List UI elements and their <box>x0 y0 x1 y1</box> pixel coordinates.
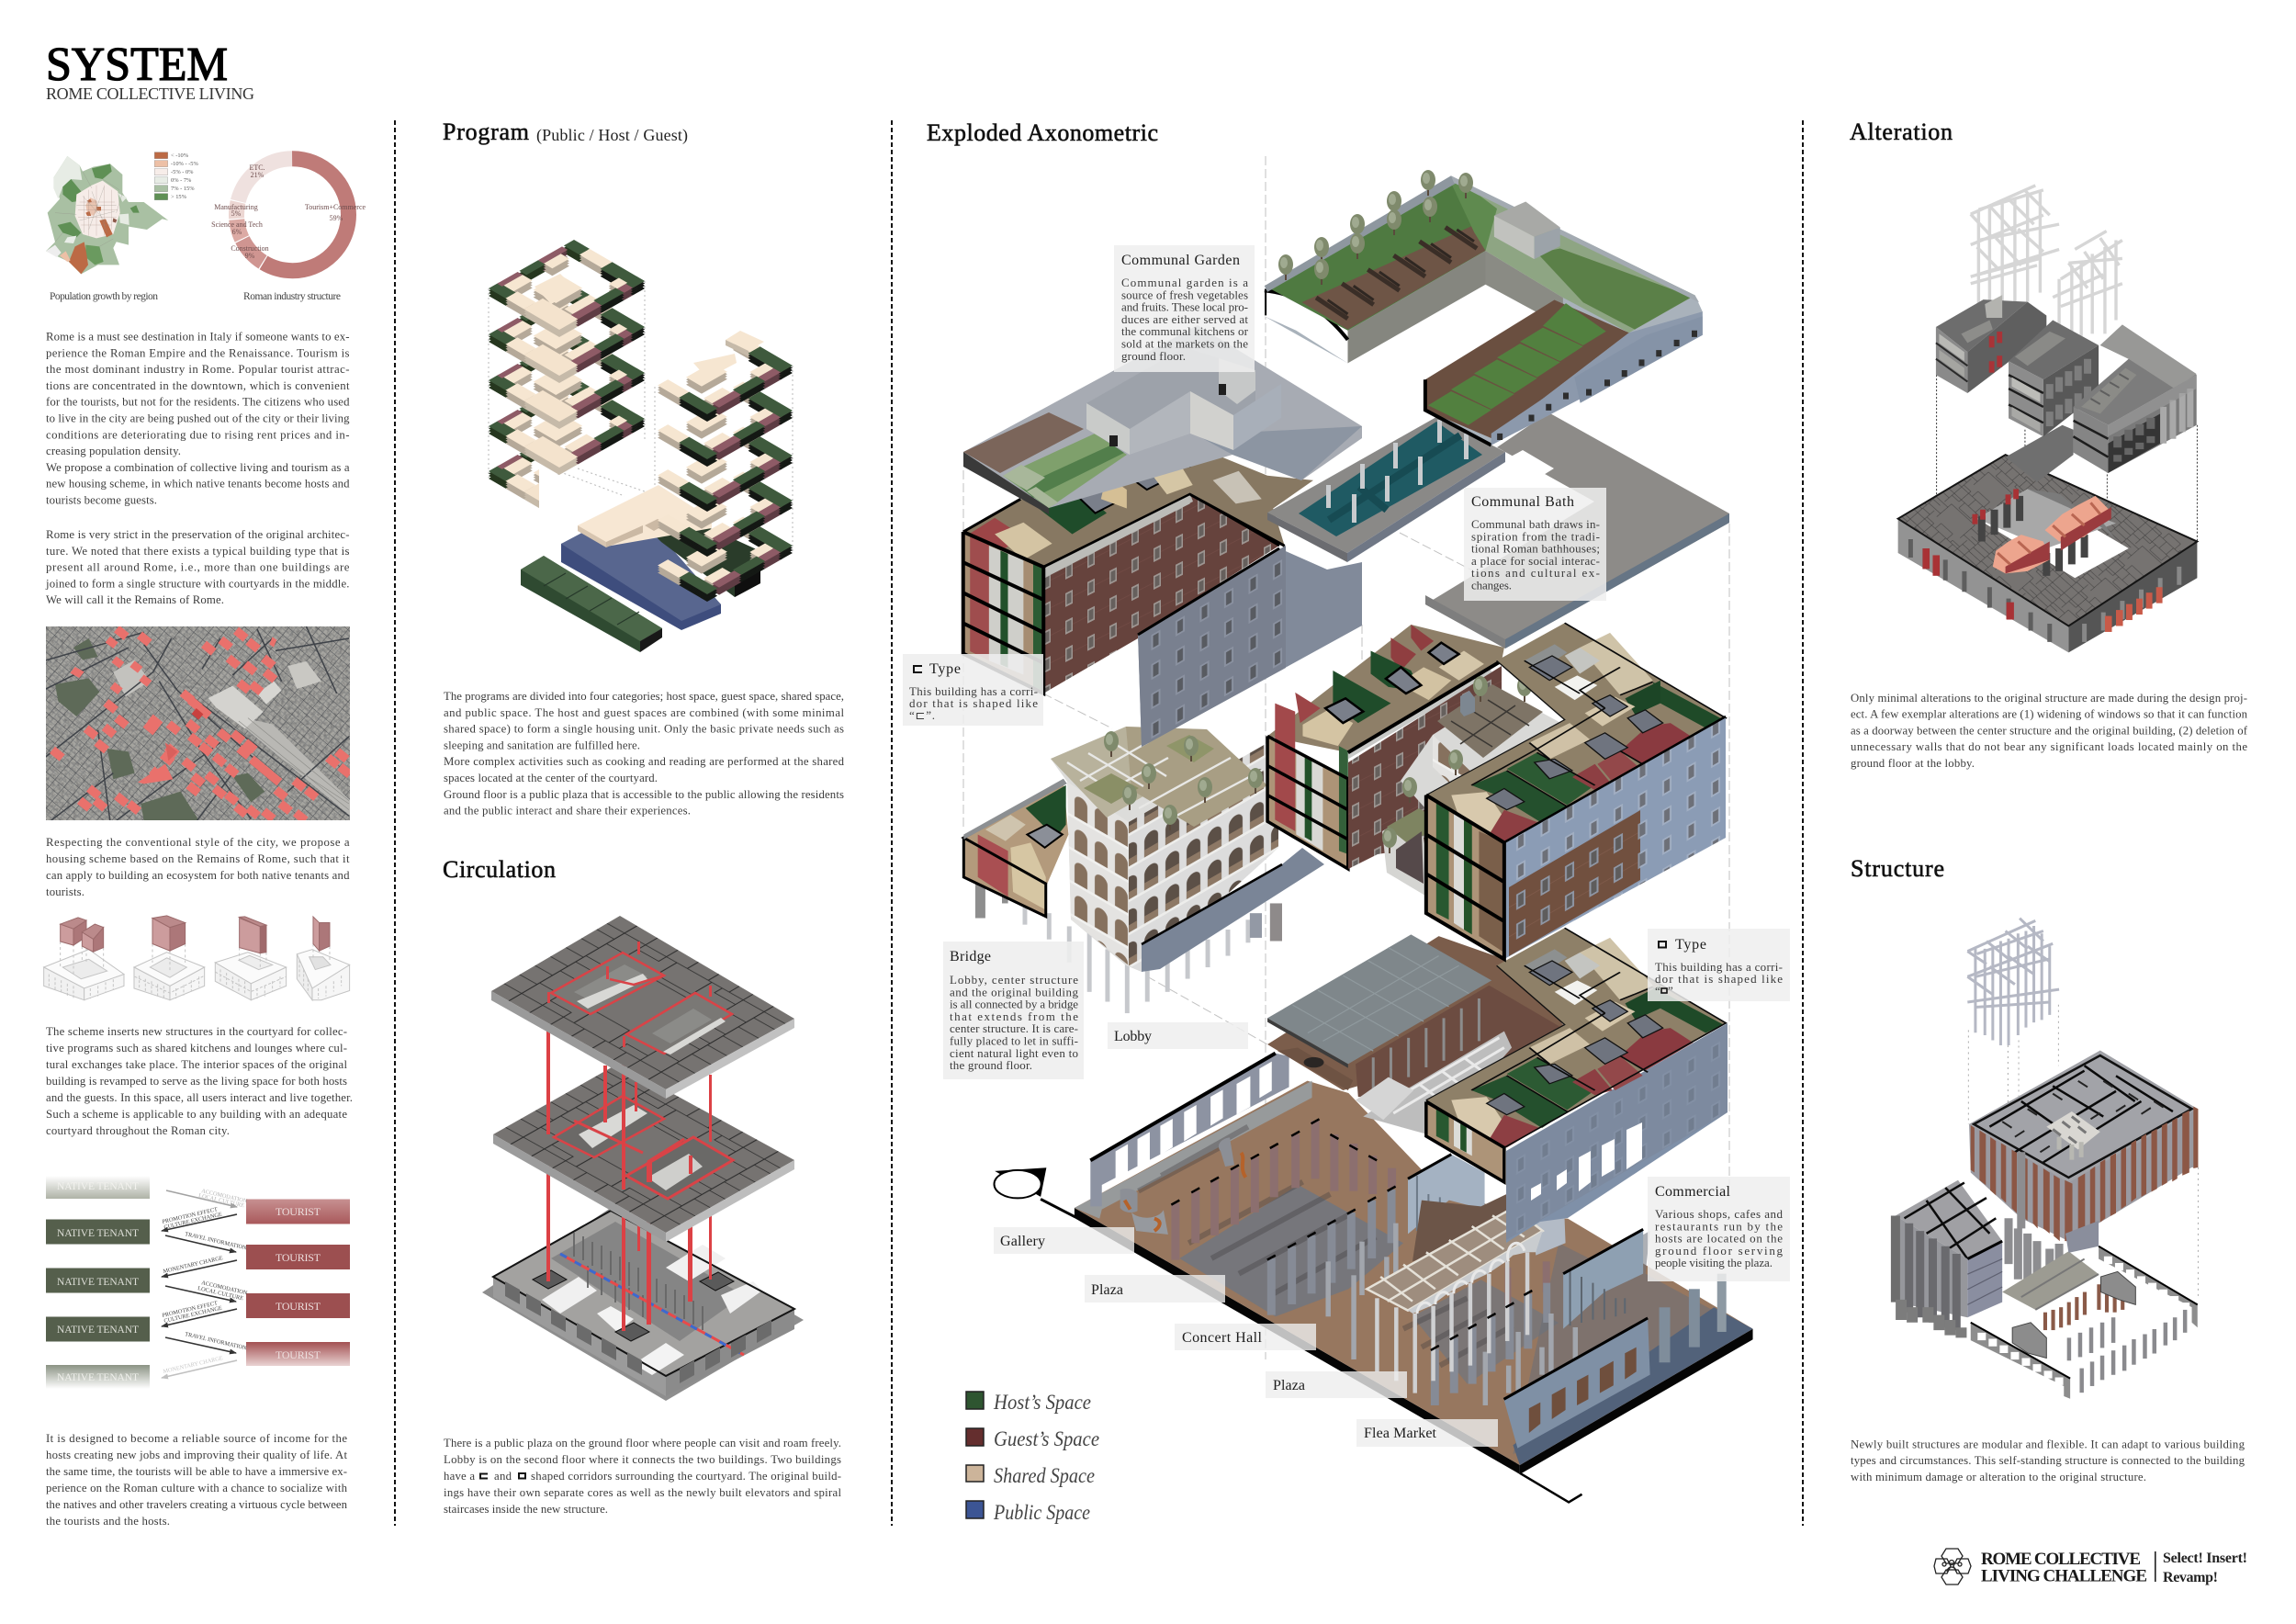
plaza columns <box>1171 1121 1550 1304</box>
dotted drop lines <box>1937 375 2197 553</box>
front block facade <box>1504 716 1726 959</box>
lobby roof <box>2002 1251 2099 1310</box>
arrow labels: ACCOMODATION <box>201 1280 248 1297</box>
map legend: > 15% <box>171 194 187 200</box>
callout: Lobby <box>1108 1022 1248 1049</box>
text: circulation description: ings have their own separate cores as well as the newly built elevators and spiral <box>444 1486 841 1499</box>
map legend: < -10% <box>171 152 189 159</box>
donut chart: Roman industry structure: 6% <box>232 228 242 236</box>
callout: Communal Bath: changes. <box>1471 579 1512 592</box>
map: population growth by region <box>46 152 168 274</box>
callout: Communal Garden: the communal kitchens or <box>1121 324 1249 338</box>
text: program description: The programs are divided into four categories; host space, guest space, shared space, <box>444 690 844 703</box>
donut chart: Roman industry structure <box>211 159 366 271</box>
lower block plan <box>1426 928 1726 1147</box>
text: courtyard paragraph: The scheme inserts new structures in the courtyard for collec- <box>46 1025 347 1038</box>
dotted guide lines <box>489 281 793 560</box>
brick inner wall <box>1348 666 1502 869</box>
text: scheme paragraph: can apply to building an ecosystem for both native tenants and <box>46 869 350 882</box>
callout: Commercial: people visiting the plaza. <box>1655 1256 1773 1269</box>
legend: Host’s Space <box>993 1391 1091 1414</box>
callout: left Type: “⊏”. <box>909 708 935 722</box>
lower facade with piers <box>1426 928 1728 1243</box>
arrow labels: TRAVEL INFORMATION <box>185 1231 248 1252</box>
native tenant boxes: NATIVE TENANT <box>57 1372 139 1383</box>
blue panel and rear wall <box>1563 1229 1727 1362</box>
lower block section <box>1426 1101 1504 1182</box>
roof slab <box>963 325 1362 514</box>
donut chart: Roman industry structure: 5% <box>231 209 242 218</box>
text: intro paragraph: tions are concentrated in the downtown, which is convenient <box>46 379 350 392</box>
callout: Communal Bath: Communal Bath <box>1471 494 1574 510</box>
callout: Bridge: cient natural light even to <box>950 1046 1078 1060</box>
arcade mass <box>1051 727 1278 972</box>
circulation diagram <box>482 916 804 1401</box>
footer title <box>1981 1550 2247 1585</box>
captions for map and donut: Population growth by region <box>50 291 158 302</box>
text: circulation description: There is a public plaza on the ground floor where people can visit and roam freely. <box>444 1437 841 1449</box>
lower right host blocks <box>643 514 760 597</box>
label: Plaza: Plaza <box>1273 1378 1305 1393</box>
scheme 4 <box>297 917 350 1000</box>
heading: Circulation: Circulation <box>443 856 556 883</box>
callout: right Type: This building has a corri- <box>1655 960 1783 974</box>
left block <box>1896 1180 2002 1337</box>
text: preservation paragraph: We will call it the Remains of Rome. <box>46 593 224 606</box>
callout: Commercial <box>1648 1177 1790 1281</box>
upper-left block <box>963 325 1362 747</box>
label: Plaza <box>1266 1371 1407 1398</box>
callout: Lobby: Lobby <box>1114 1029 1152 1044</box>
red vertical circulation upper <box>546 1031 712 1190</box>
blue glass partition <box>1408 1155 1485 1234</box>
callout: Commercial: Various shops, cafes and <box>1655 1207 1784 1221</box>
callout: Communal Bath: Communal bath draws in- <box>1471 517 1600 531</box>
arrow labels: PROMOTION EFFECT <box>162 1300 219 1319</box>
text: scheme paragraph: tourists. <box>46 885 84 898</box>
text: courtyard paragraph: Such a scheme is applicable to any building with an adequate <box>46 1108 347 1121</box>
text: alteration description <box>1851 692 2248 770</box>
native tenant boxes <box>46 1176 150 1389</box>
text: preservation paragraph <box>45 528 350 606</box>
callout: Bridge: Bridge <box>950 949 991 964</box>
text: structure description: types and circumstances. This self-standing structure is connected to the building <box>1851 1454 2245 1467</box>
upper plan rooms <box>963 429 1313 576</box>
hanging piers under upper block <box>2009 1152 2059 1287</box>
exchange arrows <box>162 1190 237 1378</box>
four building scheme diagrams <box>44 916 350 1000</box>
label: Gallery <box>994 1227 1134 1254</box>
upper section <box>963 532 1043 694</box>
text: circulation description: and <box>494 1470 512 1483</box>
text: intro paragraph: perience the Roman Empire and the Renaissance. Tourism is <box>46 346 350 359</box>
heading: Structure: Structure <box>1851 855 1944 882</box>
roof box <box>1494 201 1560 259</box>
label: Plaza <box>1085 1275 1225 1303</box>
brick piers right face <box>2078 1106 2198 1237</box>
tourist boxes: TOURIST <box>276 1300 321 1313</box>
arrow labels <box>162 1188 248 1375</box>
map legend: 0% - 7% <box>171 177 192 184</box>
roof volumes <box>1086 347 1281 455</box>
text: program description: spaces located at the center of the courtyard. <box>444 772 658 784</box>
text: program description: and the public interact and share their experiences. <box>444 805 691 818</box>
core boxes <box>2012 1271 2135 1359</box>
donut chart: Roman industry structure: Construction <box>231 244 269 253</box>
parapet facade <box>1491 311 1703 445</box>
upper block plan <box>1426 623 1726 842</box>
text: courtyard paragraph <box>46 1025 353 1137</box>
courtyard terrace arcs <box>1382 676 1566 896</box>
callout: Commercial: ground floor serving <box>1655 1244 1784 1257</box>
ground floor host blocks <box>521 556 662 652</box>
diagram: tenants and tourists exchange <box>46 1176 350 1389</box>
arrow labels: LOCAL CULTURE <box>197 1285 244 1302</box>
text: program description: shared space) to form a single housing unit. Only the basic private needs such as <box>444 723 844 736</box>
tourist boxes: TOURIST <box>276 1205 321 1218</box>
text: scheme paragraph: housing scheme based on the Remains of Rome, such that it <box>46 852 350 865</box>
text: preservation paragraph: ture. We noted that there exists a typical building type that is <box>46 545 350 558</box>
left tower floors <box>489 240 645 520</box>
text: intro paragraph: We propose a combination of collective living and tourism as a <box>46 461 350 474</box>
back block section and rooms <box>1267 625 1504 869</box>
stepped terrace <box>1425 300 1629 445</box>
callout: Bridge: Lobby, center structure <box>950 973 1078 987</box>
center arcade structure <box>963 727 1324 1013</box>
callout: Commercial: hosts are located on the <box>1655 1232 1783 1246</box>
heading: Program: (Public / Host / Guest) <box>536 126 688 145</box>
scheme 2 <box>134 916 205 1000</box>
callout: Bridge: and the original building <box>950 985 1078 998</box>
label: Gallery: Gallery <box>1000 1234 1045 1249</box>
upper wall mass <box>1969 1051 2198 1241</box>
text: circulation description: Lobby is on the second floor where it connects the two buildings. Two buildings <box>444 1453 841 1466</box>
captions for map and donut: Roman industry structure <box>243 291 341 302</box>
text: circulation description: have a <box>444 1470 475 1483</box>
red vertical circulation lower <box>546 1167 712 1331</box>
bridge roof grid <box>1367 1208 1543 1314</box>
text: intro paragraph: Rome is a must see destination in Italy if someone wants to ex- <box>46 331 349 344</box>
footer title: ROME COLLECTIVE <box>1981 1550 2141 1569</box>
native tenant boxes: NATIVE TENANT <box>57 1181 139 1192</box>
lower perimeter walls <box>1971 1246 2198 1399</box>
upper block 2 <box>2009 320 2099 436</box>
map legend: 7% - 15% <box>171 186 195 192</box>
callout: Communal Garden: source of fresh vegetables <box>1121 288 1248 301</box>
courtyard piers <box>2067 1310 2187 1393</box>
tourist boxes: TOURIST <box>276 1251 321 1264</box>
alteration highlights <box>1922 489 2163 632</box>
text: structure description <box>1851 1438 2245 1483</box>
legend: Public Space <box>993 1501 1090 1524</box>
callout: Bridge: is all connected by a bridge <box>950 998 1078 1011</box>
back wall with windows <box>1090 1054 1300 1206</box>
column dividers <box>395 120 1803 1526</box>
text: program description: and public space. The host and guest spaces are combined (with some minimal <box>444 706 844 719</box>
text: intro paragraph: new housing scheme, in which native tenants become hosts and <box>46 478 350 491</box>
heading: Program: Program <box>443 118 529 145</box>
text: income paragraph: the natives and other travelers creating a virtuous cycle between <box>46 1498 348 1511</box>
arrow labels: PROMOTION EFFECT <box>162 1206 219 1225</box>
callout: right Type: ” <box>1668 984 1673 998</box>
program diagram <box>489 240 793 652</box>
donut chart: Roman industry structure: 21% <box>251 171 264 179</box>
legend: Shared Space <box>994 1464 1095 1487</box>
footer title: LIVING CHALLENGE <box>1981 1567 2147 1585</box>
exploded axonometric drawing <box>963 156 1753 1502</box>
bridge slab <box>2006 425 2074 482</box>
structure diagram <box>1896 919 2198 1399</box>
scheme 1 <box>44 918 124 1000</box>
text: alteration description: unnecessary walls that do not bear any significant loads located mainly on the <box>1851 740 2247 753</box>
arrow labels: TRAVEL INFORMATION <box>185 1331 248 1352</box>
text: circulation description <box>444 1437 841 1516</box>
callout: Communal Bath: tional Roman bathhouses; <box>1471 542 1600 556</box>
text: alteration description: as a doorway between the center structure and the original building, (2) deletion of <box>1851 724 2248 737</box>
arcade blue wall <box>1142 848 1324 972</box>
heading: Exploded Axonometric: Exploded Axonometric <box>927 119 1158 146</box>
ground ring <box>1898 455 2197 652</box>
callout: Communal Garden: duces are either served at <box>1121 312 1248 326</box>
dashed guide lines <box>963 156 1729 1359</box>
arrow labels: LOCAL CULTURE <box>198 1192 245 1209</box>
callout: left Type: dor that is shaped like <box>909 696 1038 710</box>
callout: Communal Bath: tions and cultural ex- <box>1471 566 1600 580</box>
donut chart: Roman industry structure: Science and Tech <box>211 220 263 229</box>
arrow labels: MONENTARY CHARGE <box>163 1355 223 1375</box>
grey blue wall <box>1138 548 1362 747</box>
callout: Communal Garden: Communal Garden <box>1121 253 1240 268</box>
label: Flea Market: Flea Market <box>1364 1426 1437 1441</box>
donut chart: Roman industry structure: Tourism+Commerce <box>305 203 366 211</box>
callout: Communal Bath: a place for social interac- <box>1471 554 1600 568</box>
text: program description: More complex activities such as cooking and reading are performed at the shared <box>444 755 845 768</box>
tourist boxes: TOURIST <box>276 1348 321 1361</box>
text: intro paragraph: tourists become guests. <box>46 494 157 507</box>
callout: left Type: This building has a corri- <box>909 684 1038 698</box>
brick wall <box>1043 494 1279 694</box>
text: alteration description: ect. A few exemplar alterations are (1) widening of windows so that it can function <box>1851 708 2248 721</box>
callout: right Type: “ <box>1655 984 1660 998</box>
map legend <box>171 152 198 200</box>
text: alteration description: Only minimal alterations to the original structure are made during the design proj- <box>1851 692 2247 705</box>
arrow labels: MONENTARY CHARGE <box>163 1255 223 1275</box>
upper block 1 <box>1936 295 2046 393</box>
text: intro paragraph: for the tourists, but not for the residents. The citizens who used <box>46 396 350 409</box>
label: Concert Hall <box>1175 1324 1316 1350</box>
text: intro paragraph: conditions are deteriorating due to rising rent prices and in- <box>46 428 349 441</box>
text: intro paragraph: the most dominant industry in Rome. Popular tourist attrac- <box>46 363 349 376</box>
arrow labels: CULTURE EXCHANGE <box>163 1305 223 1325</box>
callout: Bridge: the ground floor. <box>950 1058 1032 1072</box>
donut chart: Roman industry structure: 59% <box>330 214 343 222</box>
callout: right Type: dor that is shaped like <box>1655 972 1783 986</box>
upper block 3 <box>2074 324 2197 473</box>
footer logo icon <box>1934 1549 1971 1585</box>
plaza ground floor <box>1075 1054 1753 1474</box>
callout: left Type: Type <box>929 661 961 677</box>
callout: Communal Garden: Communal garden is a <box>1121 276 1248 289</box>
text: circulation description: shaped corridors surrounding the courtyard. The original build- <box>531 1470 841 1483</box>
text: circulation description: staircases inside the new structure. <box>444 1503 608 1516</box>
text: courtyard paragraph: tural exchanges take place. The interior spaces of the original <box>46 1058 347 1071</box>
right tower floors <box>658 331 793 602</box>
garden trees <box>1278 170 1473 285</box>
callout: Bridge: center structure. It is care- <box>950 1021 1078 1035</box>
columns below arcade <box>975 877 1282 1013</box>
text: program description: sleeping and sanitation are fulfilled here. <box>444 739 640 751</box>
captions for map and donut <box>50 291 341 302</box>
label: Concert Hall: Concert Hall <box>1182 1330 1263 1346</box>
arrow labels: ACCOMODATION <box>201 1188 248 1205</box>
callout: Communal Bath: spiration from the tradi- <box>1471 529 1600 543</box>
map legend: -5% - 0% <box>171 169 194 175</box>
communal garden roof <box>1265 175 1703 445</box>
front block section <box>1426 795 1504 959</box>
map legend: -10% - -5% <box>171 161 198 167</box>
text: preservation paragraph: present all around Rome, i.e., more than one buildings are <box>46 561 350 574</box>
text: structure description: with minimum damage or alteration to the original structure. <box>1851 1471 2146 1483</box>
donut chart: Roman industry structure: ETC. <box>249 164 265 172</box>
gallery sculptures <box>1120 1137 1245 1235</box>
aerial photo of Rome <box>46 626 350 820</box>
ground floor <box>482 1208 804 1401</box>
pool <box>1267 417 1505 562</box>
public space block <box>561 505 721 630</box>
new white structure <box>2046 1111 2100 1160</box>
callout: Bridge: that extends from the <box>950 1009 1078 1023</box>
text: intro paragraph <box>46 331 350 507</box>
communal bath floor <box>1267 412 1729 648</box>
footer title: Select! Insert! <box>2163 1551 2247 1566</box>
text: courtyard paragraph: tive programs such as shared kitchens and lounges where cul- <box>46 1042 347 1054</box>
text: alteration description: ground floor at the lobby. <box>1851 757 1975 770</box>
steel frame <box>1967 919 2059 1045</box>
text: income paragraph: hosts creating new jobs and improving their quality of life. At <box>46 1449 347 1461</box>
title: ROME COLLECTIVE LIVING <box>46 85 254 103</box>
footer title: Revamp! <box>2163 1570 2218 1585</box>
arrow labels: CULTURE EXCHANGE <box>163 1212 223 1231</box>
text: courtyard paragraph: building is revamped to serve as the living space for both hosts <box>46 1075 347 1088</box>
text: program description: Ground floor is a public plaza that is accessible to the public allowing the residents <box>444 788 844 801</box>
native tenant boxes: NATIVE TENANT <box>57 1228 139 1239</box>
lobby pavilion <box>1267 934 1565 1136</box>
donut chart: Roman industry structure: 9% <box>245 252 255 260</box>
text: income paragraph: the same time, the tourists will be able to have a immersive ex- <box>46 1465 347 1478</box>
right block mid level <box>1267 623 1726 959</box>
text: income paragraph: the tourists and the hosts. <box>46 1515 170 1528</box>
heading: Alteration: Alteration <box>1850 118 1953 145</box>
legend: Guest’s Space <box>994 1427 1099 1450</box>
label: Flea Market <box>1356 1419 1498 1447</box>
text: scheme paragraph <box>46 836 350 898</box>
lower-left section with rooms <box>963 779 1068 917</box>
callout: Bridge <box>943 942 1084 1079</box>
text: preservation paragraph: Rome is very strict in the preservation of the original architec- <box>46 528 349 541</box>
callout: Communal Garden <box>1114 245 1255 372</box>
tourist boxes <box>246 1200 350 1366</box>
middle floor slab <box>493 1064 794 1242</box>
compass north arrow <box>994 1167 1581 1502</box>
text: courtyard paragraph: and the guests. In this space, all users interact and live together. <box>46 1091 353 1104</box>
brick piers left face <box>1971 1125 2073 1241</box>
donut chart: Roman industry structure: Manufacturing <box>214 203 258 211</box>
callout: Commercial: restaurants run by the <box>1655 1219 1783 1233</box>
label: Plaza: Plaza <box>1091 1282 1123 1298</box>
scheme 3 <box>215 917 287 1000</box>
callout: right Type: Type <box>1675 937 1706 953</box>
flea market front wall <box>1503 1318 1650 1449</box>
text: income paragraph: perience on the Roman culture with a chance to socialize with <box>46 1482 348 1494</box>
callout: left Type <box>903 654 1043 726</box>
callout: Commercial: Commercial <box>1655 1184 1731 1200</box>
text: structure description: Newly built structures are modular and flexible. It can adapt to various building <box>1851 1438 2245 1451</box>
title: SYSTEM <box>46 39 228 91</box>
callout: Communal Garden: and fruits. These local pro- <box>1121 300 1248 314</box>
alteration diagram <box>1898 186 2197 652</box>
text: scheme paragraph: Respecting the conventional style of the city, we propose a <box>46 836 350 849</box>
callout: right Type <box>1648 929 1790 1001</box>
native tenant boxes: NATIVE TENANT <box>57 1277 139 1288</box>
native tenant boxes: NATIVE TENANT <box>57 1325 139 1336</box>
corridor shape icons inline <box>480 1473 525 1479</box>
callout: Bridge: fully placed to let in suffi- <box>950 1034 1078 1047</box>
text: preservation paragraph: joined to form a single structure with courtyards in the middle. <box>45 577 349 590</box>
text: intro paragraph: creasing population density. <box>46 445 181 457</box>
top floor slab <box>491 916 794 1099</box>
callout: Communal Garden: ground floor. <box>1121 349 1186 363</box>
text: income paragraph <box>46 1432 348 1528</box>
legend <box>966 1391 1099 1524</box>
text: intro paragraph: to live in the city are being pushed out of the city or their living <box>46 412 350 424</box>
white structural frames <box>1971 186 2122 338</box>
text: income paragraph: It is designed to become a reliable source of income for the <box>46 1432 347 1445</box>
callout: Communal Garden: sold at the markets on the <box>1121 336 1248 351</box>
shared lobby slab <box>578 485 712 547</box>
text: program description <box>444 690 845 818</box>
text: courtyard paragraph: courtyard throughout the Roman city. <box>46 1124 230 1137</box>
heading: Program <box>443 118 688 145</box>
callout: Communal Bath <box>1464 488 1606 601</box>
